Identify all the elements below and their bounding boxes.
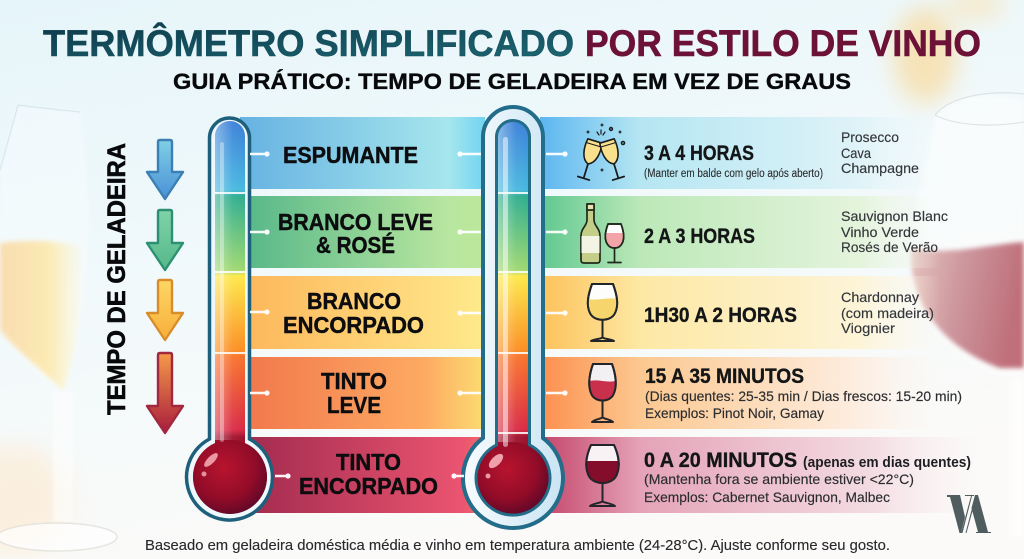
label: branco encorpado: BRANCO — [307, 288, 401, 314]
varieties: branco leve: Sauvignon Blanc — [841, 208, 948, 224]
arrow: blue — [147, 140, 183, 199]
label: espumante: ESPUMANTE — [283, 142, 418, 168]
varieties: branco leve: Rosés de Verão — [841, 239, 938, 255]
label: tinto encorpado: TINTO — [336, 449, 401, 475]
logo: VA monogram — [947, 495, 991, 533]
label: branco leve e rosé: & ROSÉ — [316, 231, 395, 258]
footer note: Baseado em geladeira doméstica média e vinho em temperatura ambiente (24-28°C). Ajuste conforme seu gosto. — [145, 538, 890, 554]
label: branco leve e rosé — [278, 209, 433, 258]
varieties: branco leve — [841, 208, 948, 255]
title: TERMÔMETRO SIMPLIFICADO — [43, 22, 574, 64]
varieties: espumante: Cava — [841, 145, 871, 161]
examples: tinto encorpado: Exemplos: Cabernet Sauvignon, Malbec — [644, 489, 890, 505]
time: 2 a 3 horas: 2 A 3 HORAS — [644, 224, 755, 248]
varieties: branco encorpado: Chardonnay — [841, 289, 919, 305]
subtitle: GUIA PRÁTICO: TEMPO DE GELADEIRA EM VEZ DE GRAUS — [173, 69, 851, 94]
title: POR ESTILO DE VINHO — [585, 23, 981, 64]
varieties: branco encorpado — [841, 289, 934, 336]
note: balde com gelo: (Manter em balde com gelo após aberto) — [644, 168, 823, 180]
label: tinto encorpado — [299, 449, 438, 499]
label: tinto leve: LEVE — [327, 392, 381, 418]
icon: white wine glass — [587, 284, 618, 341]
decorative blurred white wine glass — [0, 104, 117, 551]
time: 15 a 35 minutos: 15 A 35 MINUTOS — [645, 364, 804, 388]
panel: style bands left — [240, 117, 485, 513]
icon: champagne toast — [576, 124, 626, 181]
right thermometer — [463, 107, 563, 528]
time: 3 a 4 horas: 3 A 4 HORAS — [644, 141, 754, 165]
scale ticks — [250, 153, 566, 477]
time: 0 a 20 minutos: 0 A 20 MINUTOS — [644, 448, 797, 472]
icon: light red wine glass — [589, 364, 616, 422]
examples: tinto leve: Exemplos: Pinot Noir, Gamay — [645, 405, 824, 421]
varieties: espumante — [841, 129, 919, 176]
time: 1h30 a 2 horas: 1H30 A 2 HORAS — [644, 303, 797, 327]
varieties: espumante: Prosecco — [841, 129, 899, 145]
icon: full-bodied red wine glass — [586, 445, 619, 506]
note: apenas em dias quentes: (apenas em dias quentes) — [803, 455, 971, 471]
panel: detail bands right — [540, 117, 980, 513]
label: tinto leve — [321, 368, 387, 418]
label: branco encorpado: ENCORPADO — [283, 312, 424, 338]
icon: bottle and rosé glass — [581, 204, 624, 263]
left thermometer — [187, 118, 273, 520]
varieties: branco encorpado: (com madeira) — [841, 305, 934, 321]
label: tinto leve: TINTO — [321, 368, 387, 394]
arrow: green — [147, 210, 183, 270]
note: dias quentes: (Dias quentes: 25-35 min / Dias frescos: 15-20 min) — [645, 388, 962, 404]
note: mantenha fora: (Mantenha fora se ambiente estiver <22°C) — [644, 471, 914, 487]
label: branco leve e rosé: BRANCO LEVE — [278, 209, 433, 235]
label: tinto encorpado: ENCORPADO — [299, 473, 438, 499]
varieties: branco leve: Vinho Verde — [841, 224, 919, 240]
label: branco encorpado — [283, 288, 424, 338]
arrow: red — [147, 353, 183, 433]
vertical axis label: TEMPO DE GELADEIRA — [103, 143, 131, 415]
arrow: yellow — [147, 280, 183, 340]
decorative blurred red wine glass — [910, 93, 1024, 538]
varieties: espumante: Champagne — [841, 160, 919, 176]
title — [43, 22, 981, 64]
varieties: branco encorpado: Viognier — [841, 320, 895, 336]
